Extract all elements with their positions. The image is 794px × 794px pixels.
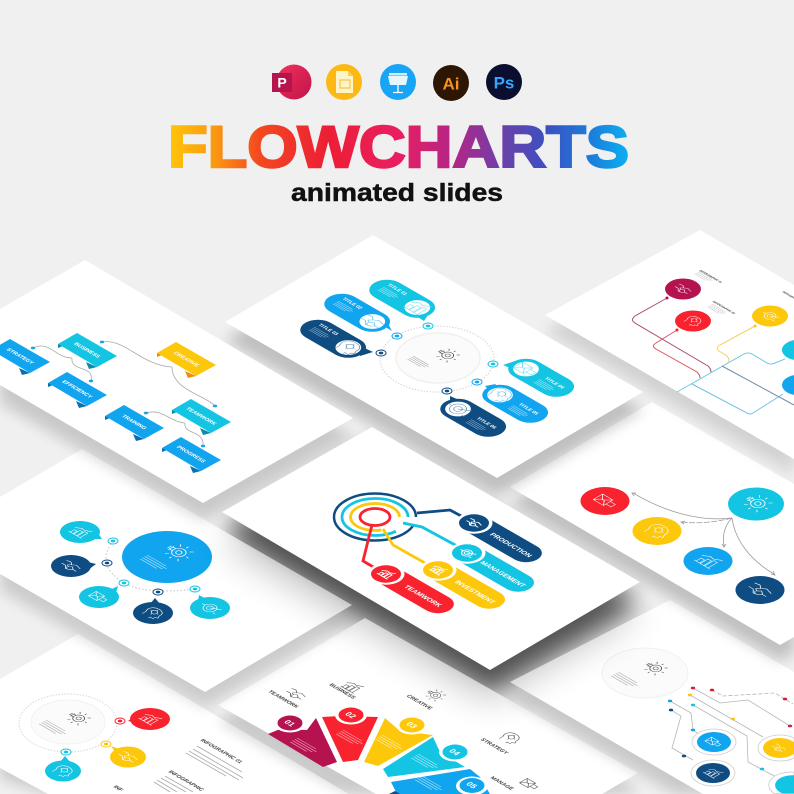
segment 05 [391,769,490,794]
infographic 01 label: INFOGRAPHIC 01 [698,269,724,284]
pill: title 04 [501,354,581,401]
red bubble [128,708,170,730]
cyan circle [782,340,794,360]
blue circle [684,547,732,575]
slide surface [510,600,794,794]
bubble: cyan right [190,595,230,619]
segment 02 [322,706,378,762]
icon: PowerPoint [272,64,312,100]
red circle [580,487,630,515]
red circle [675,310,711,332]
bar: management: MANAGEMENT [478,560,527,589]
dashed circle [380,326,494,392]
pill: title 04: TITLE 04 [542,376,566,390]
soft centre circle [602,648,688,698]
panel: arrow fan slide [510,402,794,645]
cyan bubble [45,756,81,782]
placeholder text [408,356,430,369]
dashed arc [106,541,195,591]
icon: Illustrator: Ai [442,74,460,94]
pill: title 03: TITLE 03 [316,323,340,337]
dashed circle [19,694,117,752]
connector: investment [383,529,425,563]
infographic 01 text [186,738,243,780]
bar: management [444,540,541,596]
pill: title 06 [433,394,513,441]
infographic 01 text: INFOGRAPHIC 01 [198,738,243,765]
icon: Illustrator [433,65,469,101]
slide surface [510,402,794,645]
tag: creative [157,342,216,378]
pill: title 05: TITLE 05 [516,402,540,416]
bar: investment [415,557,512,612]
connector curves [33,342,215,446]
infographic 02 label: INFOGRAPHIC 02 [711,300,737,315]
pill: title 02: TITLE 02 [340,297,364,311]
segment 01 [268,714,337,767]
panel: circle with text list slide [0,634,349,794]
segment 03 [364,716,433,766]
bar: production: PRODUCTION [488,532,533,559]
panel: connector lines slide [545,230,794,459]
yellow node [758,735,794,761]
slide surface [545,230,794,459]
cyan node [769,772,794,794]
navy circle [736,576,784,604]
yellow circle [632,517,682,545]
label: business: BUSINESS [327,683,357,700]
tag: efficiency [48,372,107,408]
connector: management [403,523,457,546]
bubble: navy lower [133,598,173,624]
nodes [102,538,200,595]
pill: title 06: TITLE 06 [474,416,498,430]
icon: bulb [432,347,463,364]
pill: title 01: TITLE 01 [385,283,409,297]
circuit dots [668,687,792,770]
tag: teamwork [172,399,231,435]
circuit lines [670,688,793,778]
connector dots [31,341,217,447]
nodes [376,323,498,394]
segment 01: 01 [282,719,298,728]
nodes [61,718,125,755]
blue circle [782,375,794,395]
bubble: navy upper [51,555,96,577]
tag: efficiency: EFFICIENCY [60,380,94,399]
slide surface [222,427,640,670]
panel: bubble hub slide [0,449,352,692]
icon: bulb [63,710,94,727]
connector lines [632,298,794,414]
slide surface [218,618,638,794]
bar: investment: INVESTMENT [452,580,497,606]
tag: creative: CREATIVE [171,351,200,368]
tag: business [58,333,117,369]
tag: teamwork: TEAMWORK [184,407,218,426]
icon: PowerPoint: P [277,74,287,90]
bar: teamwork: TEAMWORK [402,584,443,608]
infographic 02 text: INFOGRAPHIC [166,770,205,792]
slide surface [0,634,349,794]
yellow circle [752,306,788,328]
placeholder text [39,720,68,736]
tag: progress: PROGRESS [175,445,207,464]
label: teamwork: TEAMWORK [266,690,300,709]
bar: production [451,510,548,566]
cyan hub [728,488,784,520]
slide surface [0,260,353,503]
crimson circle [665,278,701,300]
icon: bulb [640,660,671,677]
segment 04: 04 [447,748,463,757]
segment 06 sliver [389,791,400,794]
label: creative: CREATIVE [404,694,434,711]
panel: tree tags slide [0,260,353,503]
yellow bubble [110,746,146,768]
segment 02: 02 [343,711,359,720]
concentric rings [334,494,416,540]
bar: teamwork [363,561,460,617]
bubble: cyan top [60,521,102,543]
icon: Keynote [380,64,416,100]
centre circle [31,700,105,744]
tag: training [105,405,164,441]
tag: strategy: STRATEGY [4,348,35,366]
subtitle: animated slides [291,179,503,207]
panel: six pill slide [225,235,643,478]
segment 05: 05 [464,781,480,790]
software icons row [272,64,522,101]
placeholder text [611,672,640,688]
blue node [692,729,736,755]
segment 04 [383,737,471,777]
curved arrows [632,493,775,575]
label: management: MANAGE [488,776,515,791]
tag: progress [162,437,221,473]
pill: title 05 [475,380,555,427]
icon: Google Slides [326,64,362,100]
pill: title 02 [317,290,397,336]
main circle [122,531,212,583]
centre circle [396,333,480,383]
icon: Photoshop: Ps [494,74,514,92]
panel: fan diagram slide [218,618,638,794]
label: strategy: STRATEGY [479,738,510,756]
slide surface [0,449,352,692]
tag: business: BUSINESS [72,342,102,359]
connector: teamwork [363,525,375,568]
pill: title 01 [362,276,442,322]
label: management [488,776,540,791]
bubble: cyan lower [79,586,119,608]
label: business [327,680,365,700]
navy node [691,760,735,786]
title: FLOWCHARTS [168,115,629,180]
connector: production [417,510,463,517]
slide surface [225,235,643,478]
tag: strategy [0,339,50,375]
panel: circuit lines slide [510,600,794,794]
infographic 03 text: INF [111,785,125,793]
icon: Photoshop [486,64,522,100]
tag: training: TRAINING [120,414,148,431]
label: strategy [479,731,523,756]
pill: title 03 [293,316,373,362]
label: creative [404,688,449,711]
panel: central target slide [222,427,640,670]
segment 03: 03 [404,721,420,730]
